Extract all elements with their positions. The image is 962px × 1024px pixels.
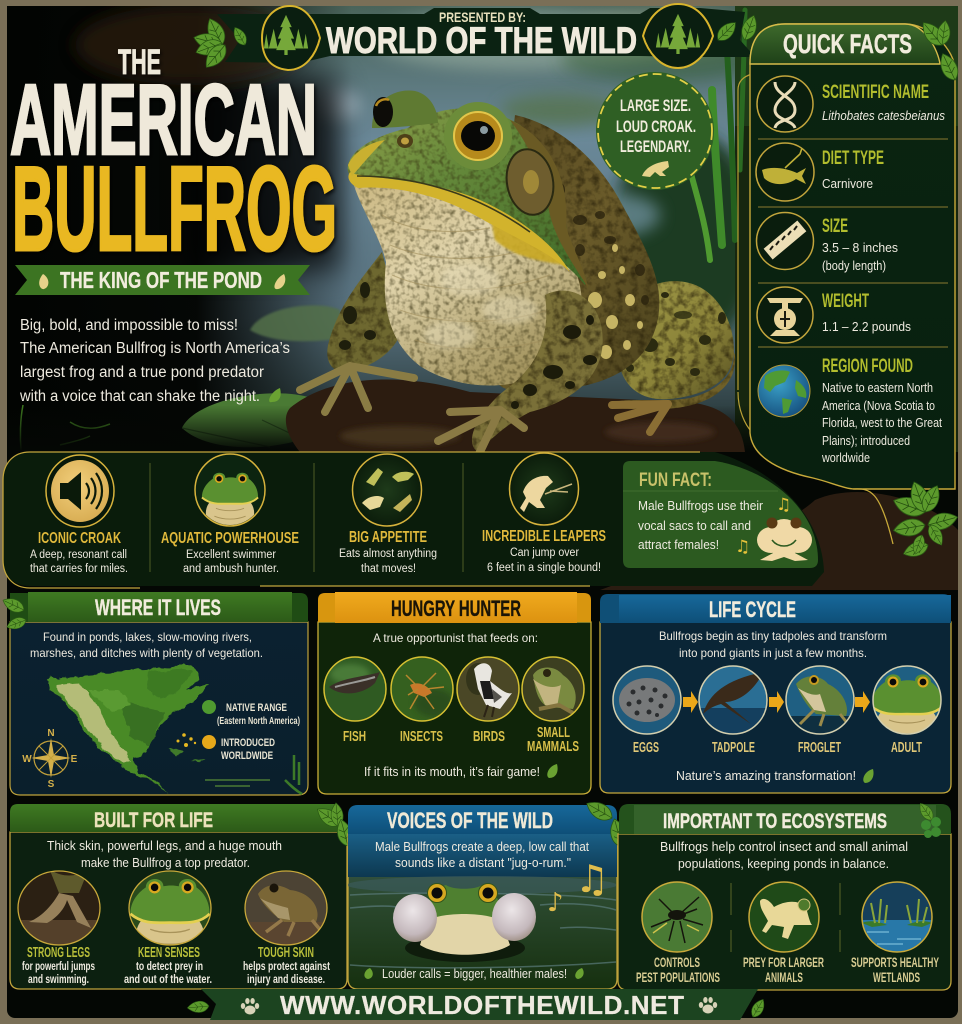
panel: voices of the wild: Male Bullfrogs create a deep, low call that (375, 840, 589, 854)
outer quick facts line (738, 74, 752, 432)
icon: frog (642, 161, 669, 177)
legend: WORLDWIDE (221, 750, 273, 762)
panel: built for life: make the Bullfrog a top predator. (81, 856, 250, 870)
panel: where it lives (0, 592, 308, 795)
pond scene (347, 876, 617, 968)
trait: strong legs: and swimming. (28, 972, 89, 986)
hero photo background (7, 5, 958, 452)
panel: hungry hunter: HUNGRY HUNTER (391, 596, 521, 621)
panel: hungry hunter (318, 592, 591, 794)
leaves right (713, 13, 760, 45)
prey: birds (457, 657, 519, 721)
feature: incredible leapers: Can jump over (510, 547, 579, 559)
panel: life cycle: LIFE CYCLE (709, 597, 796, 622)
heading: QUICK FACTS (783, 29, 912, 59)
fact: region found: Native to eastern North (822, 381, 933, 395)
intro paragraph: The American Bullfrog is North America’s (20, 340, 290, 357)
trait: tough skin: TOUGH SKIN (258, 945, 314, 961)
near hand toes (438, 410, 524, 456)
intro paragraph: with a voice that can shake the night. (19, 388, 260, 405)
prey: insects (391, 657, 454, 721)
callout badge (596, 72, 714, 190)
compass rose: S (48, 779, 55, 790)
icon: paw right (699, 997, 717, 1014)
icon: music notes (735, 495, 791, 557)
prey labels: MAMMALS (527, 739, 579, 755)
fact: region found (758, 356, 942, 465)
stage labels (633, 740, 922, 756)
intro paragraph (19, 317, 290, 405)
intro paragraph: largest frog and a true pond predator (20, 364, 264, 381)
leaf cluster (853, 479, 959, 560)
stage labels: EGGS (633, 740, 659, 756)
arrow (769, 691, 784, 713)
panel: life cycle (600, 594, 951, 793)
legend: (Eastern North America) (217, 716, 300, 727)
icon: music notes (547, 857, 609, 918)
panel: built for life (10, 802, 355, 989)
leaves (0, 595, 28, 632)
far foot toes (300, 366, 414, 412)
feature: incredible leapers: 6 feet in a single bound! (487, 562, 601, 574)
compass rose: W (22, 754, 32, 765)
feature: big appetite: BIG APPETITE (349, 529, 427, 546)
trait: strong legs: STRONG LEGS (27, 945, 90, 961)
reeds (285, 755, 302, 794)
benefit: controls pest populations (636, 882, 720, 985)
footer banner (187, 989, 768, 1020)
fact: scientific name (757, 76, 945, 132)
panel: where it lives: marshes, and ditches with plenty of vegetation. (30, 646, 263, 660)
fact: size: 3.5 – 8 inches (822, 240, 898, 255)
panel: life cycle: Nature’s amazing transformation! (676, 769, 856, 783)
callout badge: LEGENDARY. (620, 137, 691, 156)
panel: hungry hunter: If it fits in its mouth, it’s fair game! (364, 765, 540, 779)
feature: incredible leapers: INCREDIBLE LEAPERS (482, 528, 606, 545)
prey: small mammals (522, 657, 584, 721)
callout: fun fact: vocal sacs to call and (638, 519, 751, 533)
icon: music notes: ♫ (735, 537, 750, 557)
icon: music notes: ♫ (776, 495, 791, 515)
panel: life cycle: into pond giants in just a few months. (679, 646, 867, 660)
url: WWW.WORLDOFTHEWILD.NET (280, 990, 686, 1020)
panel: where it lives: WHERE IT LIVES (95, 595, 221, 620)
legend (176, 700, 300, 762)
fact: scientific name: Lithobates catesbeianus (822, 108, 945, 123)
prey labels: FISH (343, 729, 366, 745)
callout: fun fact: Male Bullfrogs use their (638, 499, 763, 513)
icon: music notes: ♫ (575, 857, 609, 901)
feature: big appetite (339, 454, 437, 575)
far front leg (327, 252, 402, 372)
panel: key features (3, 452, 824, 588)
fact: size (756, 212, 898, 273)
fact: diet type: Carnivore (822, 176, 873, 191)
lip (348, 172, 570, 272)
benefit: supports healthy wetlands: WETLANDS (873, 969, 920, 985)
header banner (192, 4, 760, 72)
icon: paw left (241, 998, 259, 1014)
panel: built for life: Thick skin, powerful legs, and a huge mouth (47, 839, 282, 853)
fact: size: SIZE (822, 216, 848, 237)
leaves (918, 18, 962, 83)
fact: weight: 1.1 – 2.2 pounds (822, 319, 911, 334)
benefit: supports healthy wetlands (851, 882, 939, 985)
icon: music notes: ♪ (547, 888, 564, 918)
leaves (313, 802, 355, 848)
panel: hungry hunter: A true opportunist that feeds on: (373, 631, 538, 645)
reeds (690, 10, 745, 260)
benefit: prey for larger animals: PREY FOR LARGER (743, 954, 824, 970)
panel: life cycle: Bullfrogs begin as tiny tadpoles and transform (659, 629, 887, 643)
feature: aquatic powerhouse (161, 454, 299, 575)
callout: fun fact: attract females! (638, 538, 719, 552)
trait: keen senses: and out of the water. (124, 972, 212, 986)
logo left (262, 6, 320, 70)
singing frog (393, 884, 536, 955)
legend: NATIVE RANGE (226, 702, 287, 714)
stage: tadpole (699, 666, 767, 734)
fact: weight: WEIGHT (822, 291, 869, 312)
panel: rock backdrop (600, 492, 958, 590)
panel: important to ecosystems: populations, keeping ponds in balance. (678, 857, 889, 871)
stage: adult (872, 665, 942, 735)
callout: fun fact: FUN FACT: (639, 470, 712, 491)
legend: INTRODUCED (221, 737, 275, 749)
rock (286, 379, 745, 452)
compass rose (22, 728, 78, 790)
benefit: prey for larger animals (743, 882, 824, 985)
feature: big appetite: that moves! (361, 563, 416, 575)
feature: aquatic powerhouse: Excellent swimmer (186, 549, 276, 561)
trait: keen senses: to detect prey in (136, 959, 203, 973)
fact: diet type: DIET TYPE (822, 148, 884, 169)
feature: iconic croak: A deep, resonant call (30, 549, 127, 561)
compass rose: E (71, 754, 78, 765)
pale back spots (570, 244, 643, 373)
throat and belly (352, 178, 582, 386)
panel: important to ecosystems (618, 800, 951, 990)
feature: iconic croak: that carries for miles. (30, 563, 128, 575)
fact: size: (body length) (822, 258, 886, 273)
near front leg (472, 291, 603, 452)
fact: region found: worldwide (821, 451, 870, 465)
title (10, 43, 337, 276)
benefit: controls pest populations: PEST POPULATIONS (636, 969, 720, 985)
feature: iconic croak (30, 455, 128, 575)
prey labels: INSECTS (400, 729, 443, 745)
tagline: Louder calls = bigger, healthier males! (382, 967, 567, 981)
fact: diet type (756, 143, 884, 201)
panel: voices of the wild: sounds like a distant "jug-o-rum." (395, 856, 571, 870)
trait: strong legs (18, 868, 100, 986)
bullfrog hero (286, 91, 745, 456)
title: AMERICAN (10, 64, 317, 176)
icon: leaf right (748, 997, 768, 1020)
trait: tough skin: injury and disease. (247, 972, 325, 986)
trait: tough skin (243, 871, 330, 986)
far eye (372, 91, 438, 128)
intro paragraph: Big, bold, and impossible to miss! (20, 317, 238, 334)
leaves (916, 800, 941, 838)
icon: frog with vocal sacs (757, 518, 812, 561)
prey labels (343, 725, 579, 755)
yellow chest patch (490, 215, 565, 265)
trait: tough skin: helps protect against (243, 959, 330, 973)
icon: leaf right (274, 274, 285, 289)
panel: voices of the wild (347, 797, 629, 989)
fact: region found: Plains); introduced (822, 434, 910, 448)
stage labels: ADULT (891, 740, 922, 756)
brand: WORLD OF THE WILD (326, 20, 637, 61)
lily pads (182, 305, 345, 447)
hind leg (610, 281, 735, 409)
nostril (397, 134, 413, 148)
callout badge: LARGE SIZE. (620, 96, 691, 115)
icon: leaf left (187, 1000, 209, 1013)
panel: where it lives: Found in ponds, lakes, slow-moving rivers, (43, 630, 252, 644)
stage labels: TADPOLE (712, 740, 755, 756)
trait: keen senses (124, 871, 212, 986)
text: BULLFROG (12, 142, 337, 276)
stage labels: FROGLET (798, 740, 841, 756)
callout: fun fact (623, 461, 818, 568)
ribbon: the king of the pond (15, 265, 310, 295)
brow fold (510, 120, 588, 288)
body (486, 115, 659, 391)
trait: keen senses: KEEN SENSES (138, 945, 200, 961)
leaves left (192, 16, 250, 72)
fact: region found: America (Nova Scotia to (822, 399, 935, 413)
stage: eggs (613, 666, 681, 734)
fact: region found: Florida, west to the Great (822, 416, 942, 430)
grass (20, 405, 110, 450)
arrow (855, 691, 870, 713)
stage: froglet (786, 666, 854, 734)
prey: fish (324, 657, 386, 721)
icon: leaf left (39, 274, 48, 289)
presented by: PRESENTED BY: (439, 9, 526, 25)
feature: big appetite: Eats almost anything (339, 548, 437, 560)
leaves (583, 797, 629, 849)
ribbon: the king of the pond: THE KING OF THE POND (60, 267, 262, 293)
benefit: prey for larger animals: ANIMALS (765, 969, 803, 985)
panel: built for life: BUILT FOR LIFE (94, 809, 213, 832)
benefit: controls pest populations: CONTROLS (654, 954, 700, 970)
feature: incredible leapers (482, 453, 606, 574)
trait: strong legs: for powerful jumps (22, 959, 95, 973)
feature: iconic croak: ICONIC CROAK (38, 530, 121, 547)
feature: aquatic powerhouse: and ambush hunter. (183, 563, 279, 575)
compass rose: N (47, 728, 55, 739)
title: THE (118, 43, 161, 82)
logo right (643, 4, 713, 68)
panel: voices of the wild: VOICES OF THE WILD (387, 808, 553, 833)
eardrum (502, 146, 558, 218)
near eye (444, 102, 512, 170)
panel: quick facts (750, 18, 962, 489)
arrow (683, 691, 698, 713)
prey labels: SMALL (537, 725, 570, 741)
panel: important to ecosystems: Bullfrogs help control insect and small animal (660, 840, 908, 854)
hind foot toes (612, 404, 668, 432)
feature: aquatic powerhouse: AQUATIC POWERHOUSE (161, 530, 299, 547)
fact: weight (757, 287, 911, 343)
map of north america (47, 664, 209, 793)
callout badge: LOUD CROAK. (616, 117, 696, 136)
head (348, 108, 586, 285)
prey labels: BIRDS (473, 729, 505, 745)
